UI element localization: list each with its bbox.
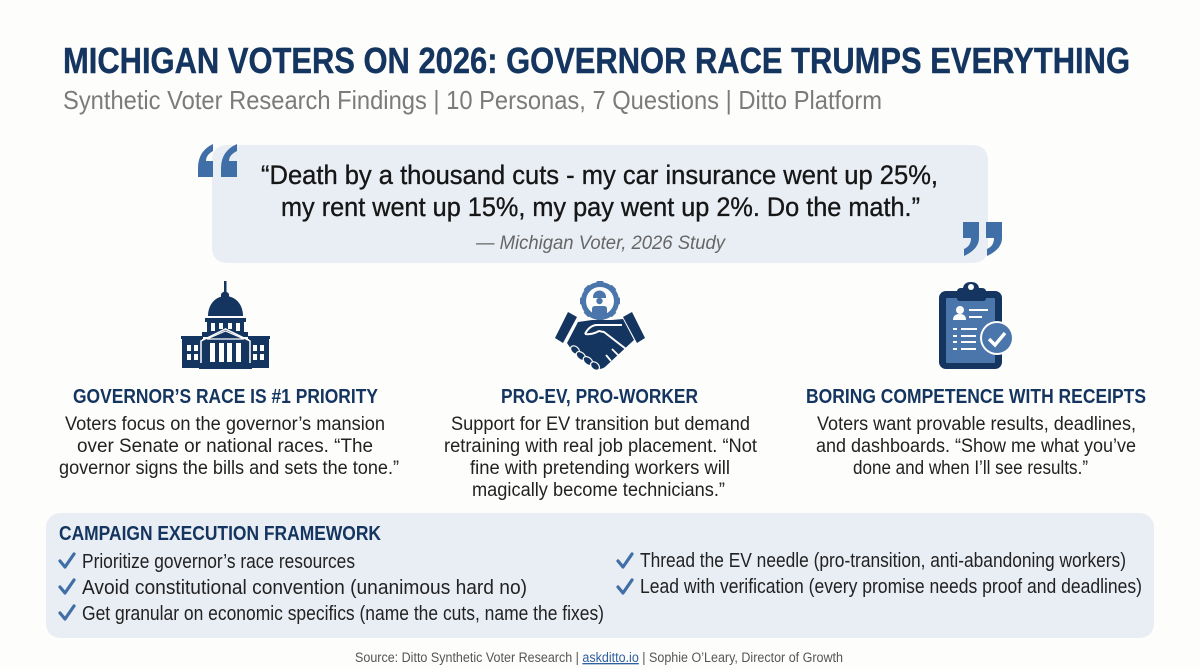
quote text <box>261 160 938 222</box>
icon: clipboard with checkmark <box>939 282 1014 369</box>
body text: over Senate or national races. “The <box>77 436 373 457</box>
quote text: “Death by a thousand cuts - my car insurance went up 25%, <box>261 160 938 190</box>
icon: capitol building <box>181 281 270 369</box>
column: governor's race <box>59 386 399 479</box>
checklist: left column <box>60 551 604 625</box>
heading: BORING COMPETENCE WITH RECEIPTS <box>806 386 1146 408</box>
column: pro-EV, pro-worker <box>444 386 758 501</box>
body text: Voters want provable results, deadlines, <box>817 414 1136 435</box>
checklist: left column: Avoid constitutional convention (unanimous hard no) <box>82 577 527 599</box>
icon: handshake with gear and worker <box>555 281 645 372</box>
checklist: right column: Thread the EV needle (pro-transition, anti-abandoning workers) <box>640 550 1126 572</box>
source footer: Source: Ditto Synthetic Voter Research | askditto.io | Sophie O’Leary, Director of Growth <box>355 650 843 665</box>
body text: and dashboards. “Show me what you’ve <box>816 436 1136 457</box>
column: boring competence <box>806 386 1146 479</box>
body text: governor signs the bills and sets the tone.” <box>59 458 399 479</box>
subtitle: Synthetic Voter Research Findings | 10 Personas, 7 Questions | Ditto Platform <box>63 85 882 115</box>
body text: Voters focus on the governor’s mansion <box>65 414 385 435</box>
checklist: left column: Prioritize governor’s race resources <box>82 551 355 573</box>
icon: opening quote mark <box>198 144 237 177</box>
checklist: right column: Lead with verification (every promise needs proof and deadlines) <box>640 576 1142 598</box>
panel: campaign execution framework <box>46 513 1154 638</box>
quote text: my rent went up 15%, my pay went up 2%. Do the math.” <box>281 192 920 222</box>
body text: Support for EV transition but demand <box>451 414 750 435</box>
body text: fine with pretending workers will <box>470 458 730 479</box>
body text: magically become technicians.” <box>472 480 725 501</box>
checklist: left column: Get granular on economic specifics (name the cuts, name the fixes) <box>82 603 604 625</box>
panel heading: CAMPAIGN EXECUTION FRAMEWORK <box>59 523 381 545</box>
quote attribution: — Michigan Voter, 2026 Study <box>475 233 726 254</box>
heading: GOVERNOR’S RACE IS #1 PRIORITY <box>73 386 379 408</box>
panel: quote <box>198 144 1002 263</box>
body text <box>59 414 399 479</box>
heading: PRO-EV, PRO-WORKER <box>501 386 698 408</box>
body text: done and when I’ll see results.” <box>853 458 1088 479</box>
body text <box>816 414 1136 479</box>
body text: retraining with real job placement. “Not <box>444 436 758 457</box>
checklist: right column <box>618 550 1142 598</box>
body text <box>444 414 758 501</box>
icon: closing quote mark <box>963 222 1002 256</box>
